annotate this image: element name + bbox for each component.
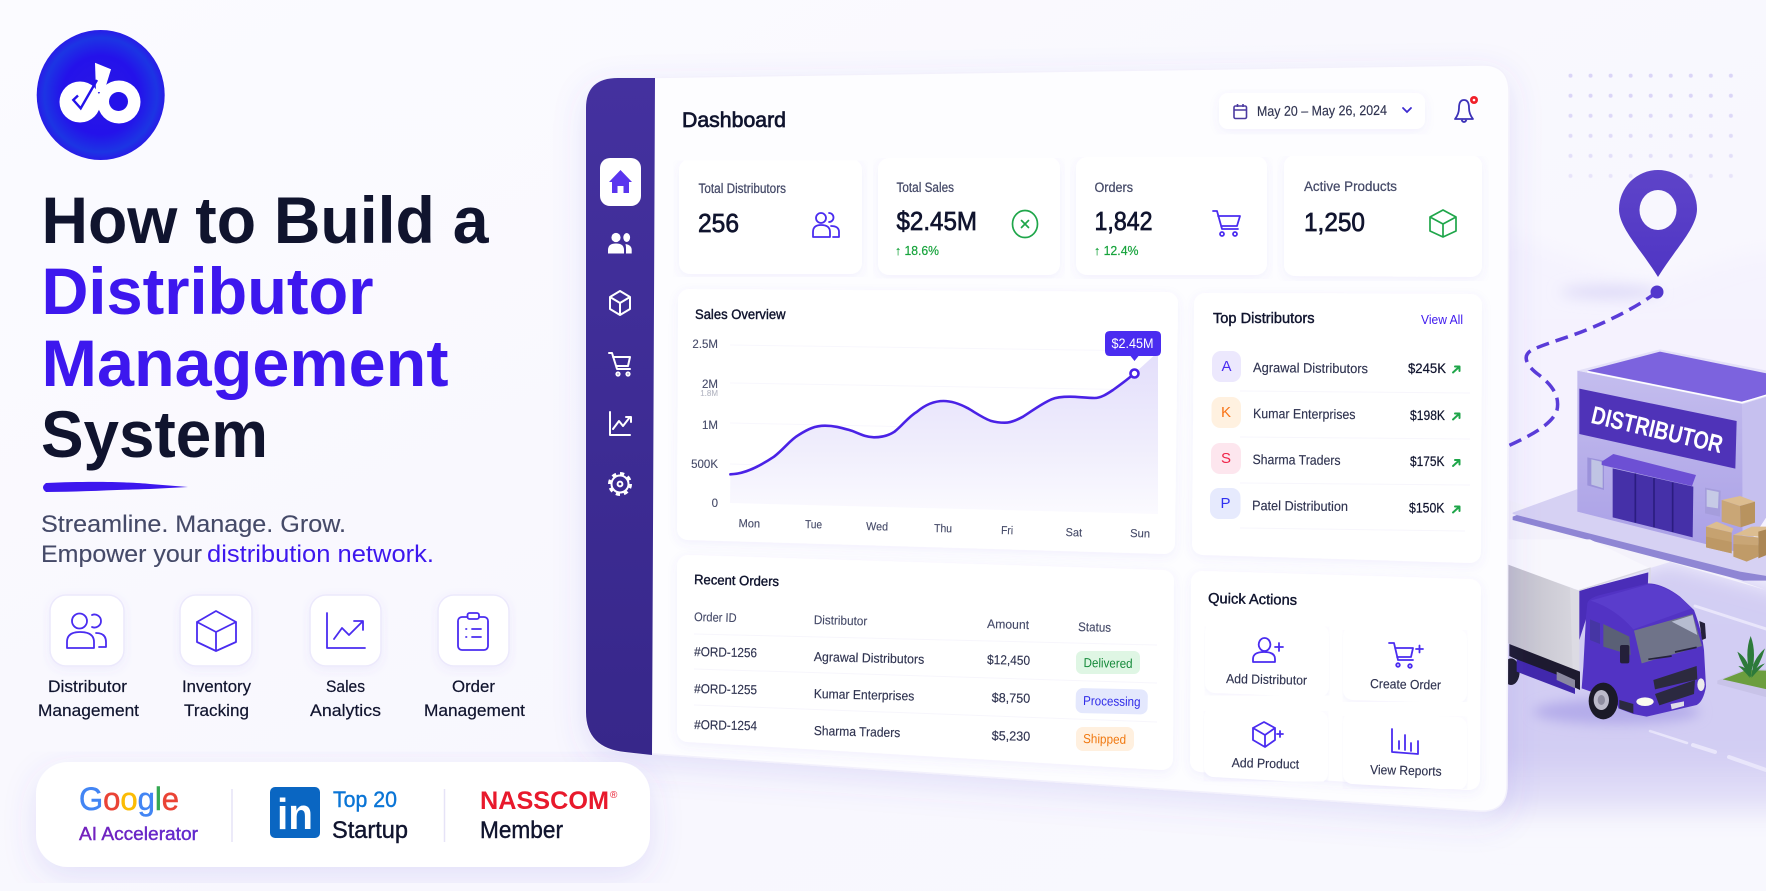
date picker: [1219, 93, 1425, 129]
row: #ORD-1255: $8,750: [992, 690, 1030, 706]
kpi card: total distributors: 256: [698, 208, 739, 238]
roof: [1577, 349, 1766, 404]
row: Agrawal Distributors: Agrawal Distributors: [1253, 360, 1368, 376]
x axis labels: Thu: [934, 523, 952, 535]
brand logo: [37, 30, 165, 160]
y axis labels: 1.8M: [700, 389, 718, 398]
icon: cart plus: [1389, 643, 1423, 668]
badge: NASSCOM Member: NASSCOM: [480, 787, 609, 815]
title: How to Build a: [42, 183, 490, 257]
row: #ORD-1254: #ORD-1254: [694, 717, 757, 733]
action: create order: [1353, 636, 1457, 693]
action: add product: Add Product: [1232, 755, 1300, 772]
subtitle: [41, 511, 434, 568]
panel: top distributors: Top Distributors: [1213, 311, 1314, 327]
icon: people: [67, 614, 106, 648]
front wheel: [1589, 683, 1618, 719]
y axis labels: 1M: [702, 420, 718, 432]
kpi card: total distributors: Total Distributors: [698, 181, 786, 196]
signboard: [1579, 389, 1737, 469]
icon: clipboard: [458, 613, 488, 650]
icon: calendar: [1234, 104, 1246, 118]
cargo box side: [1500, 562, 1573, 671]
area fill: [730, 352, 1158, 514]
kpi card: total sales: Total Sales: [896, 180, 954, 195]
panel: recent orders: Recent Orders: [694, 572, 779, 589]
panel: quick actions: [1201, 582, 1470, 780]
dashed route: [1508, 286, 1664, 446]
title: Management: [42, 326, 449, 400]
feature: order management: [424, 595, 525, 720]
kpi card: orders: ↑ 12.4%: [1094, 244, 1138, 258]
action: add product: [1214, 717, 1318, 773]
panel: top distributors: [1203, 304, 1471, 552]
subtitle: Streamline. Manage. Grow.: [41, 511, 346, 538]
road: [1490, 562, 1766, 830]
dashboard panel: [586, 65, 1509, 811]
left window: [1587, 457, 1604, 490]
icon: box plus: [1253, 722, 1283, 747]
feature: sales analytics: Sales: [326, 677, 365, 696]
kpi card: total sales: $2.45M: [896, 206, 977, 236]
road markings: [1650, 606, 1766, 770]
title: [41, 183, 490, 471]
kpi card: active products: Active Products: [1304, 179, 1397, 194]
feature: sales analytics: [310, 595, 381, 720]
row: Sharma Traders: [1211, 443, 1460, 474]
row: Agrawal Distributors: [1212, 351, 1460, 382]
panel: quick actions: Quick Actions: [1208, 591, 1297, 609]
y axis labels: 0: [712, 498, 718, 510]
feature: order management: Management: [424, 701, 525, 720]
row: Patel Distribution: $150K: [1409, 500, 1444, 516]
table header: Distributor: [814, 613, 867, 628]
row: #ORD-1256: #ORD-1256: [694, 644, 757, 660]
icon: home: [609, 170, 632, 193]
action: add distributor: Add Distributor: [1226, 671, 1308, 688]
dot grid pattern: [1560, 66, 1741, 186]
panel: recent orders: [688, 566, 1163, 759]
x axis labels: Sun: [1130, 528, 1150, 540]
dashboard heading: Dashboard: [682, 109, 786, 132]
table header: Status: [1078, 620, 1111, 635]
delivery truck: [1500, 539, 1706, 724]
icon: settings gear: [610, 474, 630, 494]
row: #ORD-1255: #ORD-1255: [694, 681, 757, 697]
action: view reports: [1353, 722, 1457, 780]
row: Kumar Enterprises: [1212, 397, 1460, 428]
feature: distributor management: Distributor: [48, 677, 127, 696]
grid lines: [730, 345, 1150, 476]
feature: inventory tracking: Inventory: [182, 677, 251, 696]
side windows: [1603, 624, 1631, 655]
base plate: [1513, 492, 1766, 581]
subtitle: distribution network.: [207, 541, 434, 568]
row: Patel Distribution: P: [1220, 495, 1231, 512]
row: #ORD-1254: $5,230: [992, 728, 1030, 744]
headlights: [1636, 697, 1654, 706]
table header: Order ID: [694, 610, 737, 625]
row: Sharma Traders: $175K: [1410, 454, 1444, 469]
scene: location, distributor building and delivery truck: [1480, 66, 1766, 850]
icon: people: [813, 213, 839, 237]
row: Sharma Traders: Sharma Traders: [1252, 452, 1341, 468]
x axis labels: Fri: [1001, 525, 1013, 537]
cardboard boxes: [1706, 496, 1766, 562]
tooltip: [1105, 331, 1161, 361]
icon: line chart: [327, 613, 365, 648]
kpi card: orders: [1087, 167, 1256, 264]
badge: NASSCOM Member: ®: [610, 790, 618, 801]
sidebar: [586, 78, 655, 755]
row: Sharma Traders: S: [1221, 450, 1231, 467]
active home tile: [600, 158, 641, 206]
action: add distributor: [1215, 632, 1319, 688]
action: view reports: View Reports: [1370, 762, 1442, 779]
badge: LinkedIn Top 20 Startup: [270, 787, 408, 844]
x axis labels: Mon: [738, 518, 760, 531]
icon: green cube: [1430, 210, 1456, 237]
panel: top distributors: View All: [1421, 313, 1463, 327]
location pin: [1560, 170, 1697, 298]
feature: distributor management: [38, 595, 139, 720]
status: shipped: [1076, 727, 1134, 751]
feature: distributor management: Management: [38, 701, 139, 720]
status: delivered: [1076, 651, 1140, 674]
icon: box: [197, 611, 236, 651]
subtitle: Empower your: [41, 541, 202, 568]
row: #ORD-1255: [694, 681, 1148, 715]
end point marker: [1130, 370, 1138, 378]
feature: inventory tracking: Tracking: [184, 701, 249, 720]
icon: cart: [609, 353, 630, 376]
row: Kumar Enterprises: $198K: [1410, 408, 1445, 423]
icon: bar report: [1392, 729, 1418, 754]
kpi card: active products: [1295, 166, 1471, 266]
row: Patel Distribution: [1210, 488, 1460, 519]
tooltip: $2.45M: [1112, 335, 1154, 351]
mirrors: [1620, 645, 1629, 663]
row: #ORD-1255: Kumar Enterprises: [814, 686, 915, 703]
chevron: [1403, 108, 1411, 112]
sign label: DISTRIBUTOR: [1589, 401, 1725, 459]
badge: Google AI Accelerator: AI Accelerator: [79, 823, 198, 844]
door: [1613, 468, 1693, 537]
windscreen: [1634, 614, 1702, 663]
row: #ORD-1255: Processing: [1083, 693, 1141, 709]
plant planter: [1717, 636, 1766, 697]
badge: LinkedIn Top 20 Startup: Startup: [332, 817, 408, 844]
kpi card: total distributors: [690, 170, 851, 263]
icon: linkedin: [270, 787, 320, 838]
awning: [1602, 454, 1696, 486]
rear wheel: [1502, 658, 1520, 685]
icon: box: [610, 291, 630, 315]
row: #ORD-1256: Agrawal Distributors: [814, 649, 925, 667]
kpi card: orders: Orders: [1094, 180, 1133, 195]
table header: [694, 610, 1111, 635]
icon: notification bell: [1455, 96, 1478, 122]
cab: [1582, 583, 1706, 717]
icon: person plus: [1253, 638, 1283, 662]
feature: order management: Order: [452, 677, 495, 696]
row: #ORD-1256: $12,450: [987, 652, 1030, 668]
chassis: [1509, 644, 1580, 690]
front wall: [1577, 371, 1743, 553]
feature: sales analytics: Analytics: [310, 701, 381, 720]
feature: inventory tracking: [180, 595, 252, 720]
kpi card: total sales: ↑ 18.6%: [895, 244, 939, 258]
row: Agrawal Distributors: A: [1221, 358, 1232, 375]
panel: sales overview chart: Sales Overview: [695, 307, 786, 322]
row: Agrawal Distributors: $245K: [1408, 361, 1446, 376]
grille: [1653, 666, 1697, 689]
icon: trend: [610, 412, 631, 435]
badge divider: [231, 789, 233, 842]
row: #ORD-1256: [694, 644, 1140, 674]
title: Distributor: [42, 254, 374, 328]
badge: NASSCOM Member: Member: [480, 817, 563, 844]
icon: green coin: [1012, 210, 1038, 238]
x axis labels: Wed: [866, 521, 888, 534]
row: #ORD-1256: Delivered: [1083, 655, 1133, 671]
x axis labels: Sat: [1065, 527, 1083, 539]
y axis labels: [691, 339, 718, 510]
kpi card: orders: 1,842: [1094, 206, 1152, 236]
row: #ORD-1254: [694, 717, 1134, 751]
badge: LinkedIn Top 20 Startup: Top 20: [333, 787, 397, 812]
row: Patel Distribution: Patel Distribution: [1252, 498, 1348, 514]
rear panel: [1579, 572, 1648, 640]
x axis labels: [738, 518, 1150, 540]
panel: sales overview chart: [688, 300, 1167, 543]
date picker: May 20 – May 26, 2024: [1257, 102, 1387, 119]
badge: NASSCOM Member: [480, 787, 618, 844]
kpi card: total sales: [889, 168, 1049, 264]
x axis labels: Tue: [805, 519, 822, 531]
icon: people: [608, 233, 632, 254]
y axis labels: 500K: [691, 459, 718, 471]
table header: Amount: [987, 617, 1030, 632]
row: #ORD-1254: Shipped: [1083, 731, 1126, 747]
sales line: [730, 373, 1134, 474]
icon: cart: [1213, 211, 1240, 236]
action: create order: Create Order: [1370, 676, 1442, 692]
ground hills: [1495, 232, 1766, 850]
status: processing: [1075, 688, 1148, 715]
right window: [1705, 488, 1721, 517]
y axis labels: 2.5M: [692, 339, 718, 351]
cargo box top: [1500, 539, 1650, 590]
number plate: [1671, 701, 1684, 709]
sidewalk: [1480, 490, 1766, 590]
recognition badges strip: [36, 762, 650, 867]
kpi card: active products: 1,250: [1304, 207, 1365, 237]
row: Kumar Enterprises: K: [1221, 404, 1231, 421]
row: #ORD-1254: Sharma Traders: [814, 723, 901, 740]
badge: Google AI Accelerator: Google: [79, 781, 179, 817]
badge: Google AI Accelerator: [79, 781, 198, 844]
badge: LinkedIn Top 20 Startup: in: [277, 790, 313, 839]
truck shadow: [1533, 699, 1700, 724]
title underline brush stroke: [43, 482, 188, 492]
badge divider: [444, 789, 446, 842]
distributor building: [1513, 349, 1766, 581]
y axis labels: 2M: [702, 379, 718, 391]
side wall: [1743, 396, 1766, 553]
title: System: [41, 397, 268, 471]
row: Kumar Enterprises: Kumar Enterprises: [1253, 406, 1356, 422]
